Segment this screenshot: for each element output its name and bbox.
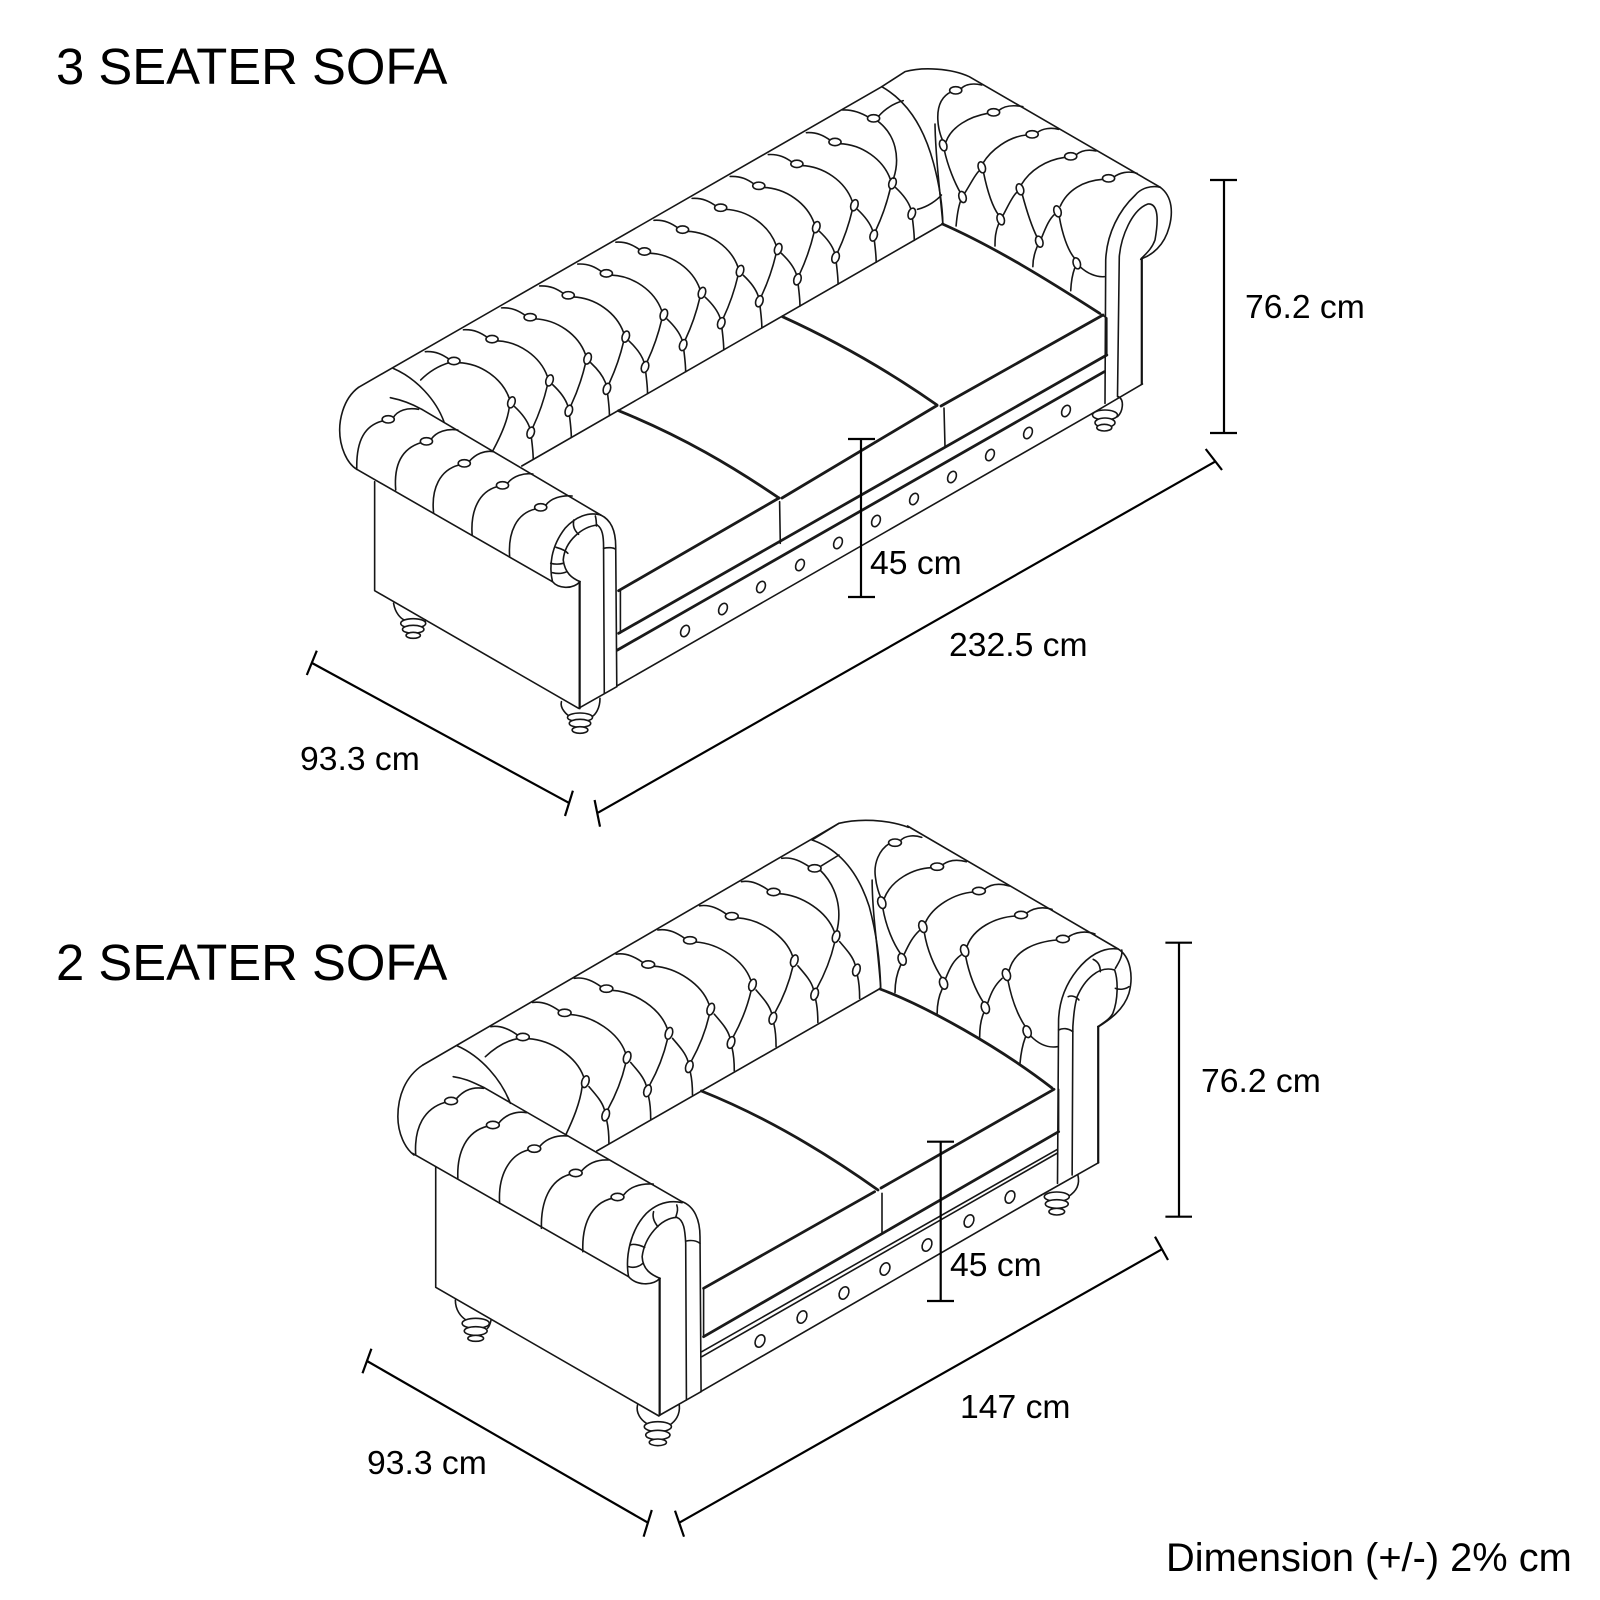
right arm [875, 826, 1131, 1215]
illustration: 3 seater sofa [340, 69, 1171, 733]
height 76.2 cm bar [1165, 943, 1192, 1217]
depth 93.3 cm line [307, 651, 573, 816]
front left arm [436, 1167, 701, 1446]
label: seat height: 45 cm [950, 1246, 1042, 1284]
rail rivets [753, 1189, 1017, 1349]
width 147 cm line [675, 1237, 1168, 1537]
backrest outline and seat edges [412, 823, 1059, 1392]
width 232.5 cm line [595, 449, 1222, 827]
title: 2 seater sofa: 2 SEATER SOFA [56, 934, 448, 991]
front left arm [357, 409, 617, 733]
height 76.2 cm bar [1210, 180, 1237, 433]
label: depth: 93.3 cm [367, 1444, 487, 1482]
seat height 45 cm bar [848, 439, 875, 597]
dimension lines: 3 seater [307, 180, 1237, 827]
label: width: 147 cm [960, 1388, 1070, 1426]
label: height: 76.2 cm [1245, 288, 1365, 326]
label: seat height: 45 cm [870, 544, 962, 582]
depth 93.3 cm line [362, 1349, 652, 1537]
backrest outline and seat edges [357, 87, 1107, 686]
footnote: dimension tolerance: Dimension (+/-) 2% cm [1166, 1536, 1572, 1580]
seat height 45 cm bar [927, 1142, 954, 1301]
illustration: 2 seater sofa [398, 820, 1131, 1446]
label: height: 76.2 cm [1201, 1062, 1321, 1100]
backrest tufting [340, 133, 917, 469]
rail rivets [679, 404, 1072, 638]
title: 3 seater sofa: 3 SEATER SOFA [56, 38, 448, 95]
label: width: 232.5 cm [949, 626, 1088, 664]
right arm [842, 69, 1171, 431]
backrest tufting [398, 820, 909, 1252]
dimension lines: 2 seater [362, 943, 1192, 1537]
label: depth: 93.3 cm [300, 740, 420, 778]
